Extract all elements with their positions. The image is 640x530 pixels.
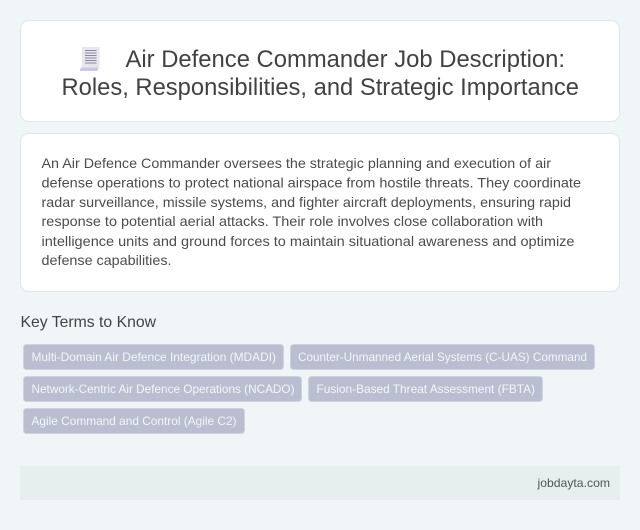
chip: FBTA: Fusion-Based Threat Assessment (FBTA): [316, 382, 535, 396]
panel: key term chips: [24, 344, 594, 434]
chip: MDADI: [24, 344, 284, 370]
title: Air Defence Commander Job Description:: [126, 46, 565, 73]
heading: key terms: Key Terms to Know: [20, 314, 156, 331]
chip: Agile C2: [24, 408, 244, 434]
text block: description: response to potential aerial attacks. Their role involves close collaboration with: [42, 213, 543, 229]
panel: description card: [20, 134, 620, 292]
chip: MDADI: Multi-Domain Air Defence Integration (MDADI): [32, 350, 276, 364]
chip: NCADO: Network-Centric Air Defence Operations (NCADO): [32, 382, 295, 396]
text block: description: defense capabilities.: [42, 252, 172, 268]
text block: description: defense operations to protect national airspace from hostile threats. They coordinate: [42, 174, 581, 190]
title: [62, 46, 579, 101]
text block: description: radar surveillance, missile systems, and fighter aircraft deployments, ensuring rapid: [42, 194, 571, 210]
chip: FBTA: [308, 376, 542, 402]
icon: document scroll: [80, 47, 100, 71]
title: Roles, Responsibilities, and Strategic Importance: [62, 74, 579, 101]
text block: description: intelligence units and ground forces to maintain situational awareness and optimize: [42, 233, 575, 249]
text block: description: [42, 155, 581, 268]
chip: C-UAS: Counter-Unmanned Aerial Systems (C-UAS) Command: [298, 350, 587, 364]
footer: [20, 466, 620, 500]
text block: description: An Air Defence Commander oversees the strategic planning and execution of air: [42, 155, 551, 171]
chip: C-UAS: [290, 344, 594, 370]
chip: Agile C2: Agile Command and Control (Agile C2): [32, 414, 236, 428]
chip: NCADO: [24, 376, 302, 402]
footer: jobdayta.com: [536, 476, 610, 490]
panel: title card: [20, 20, 620, 122]
